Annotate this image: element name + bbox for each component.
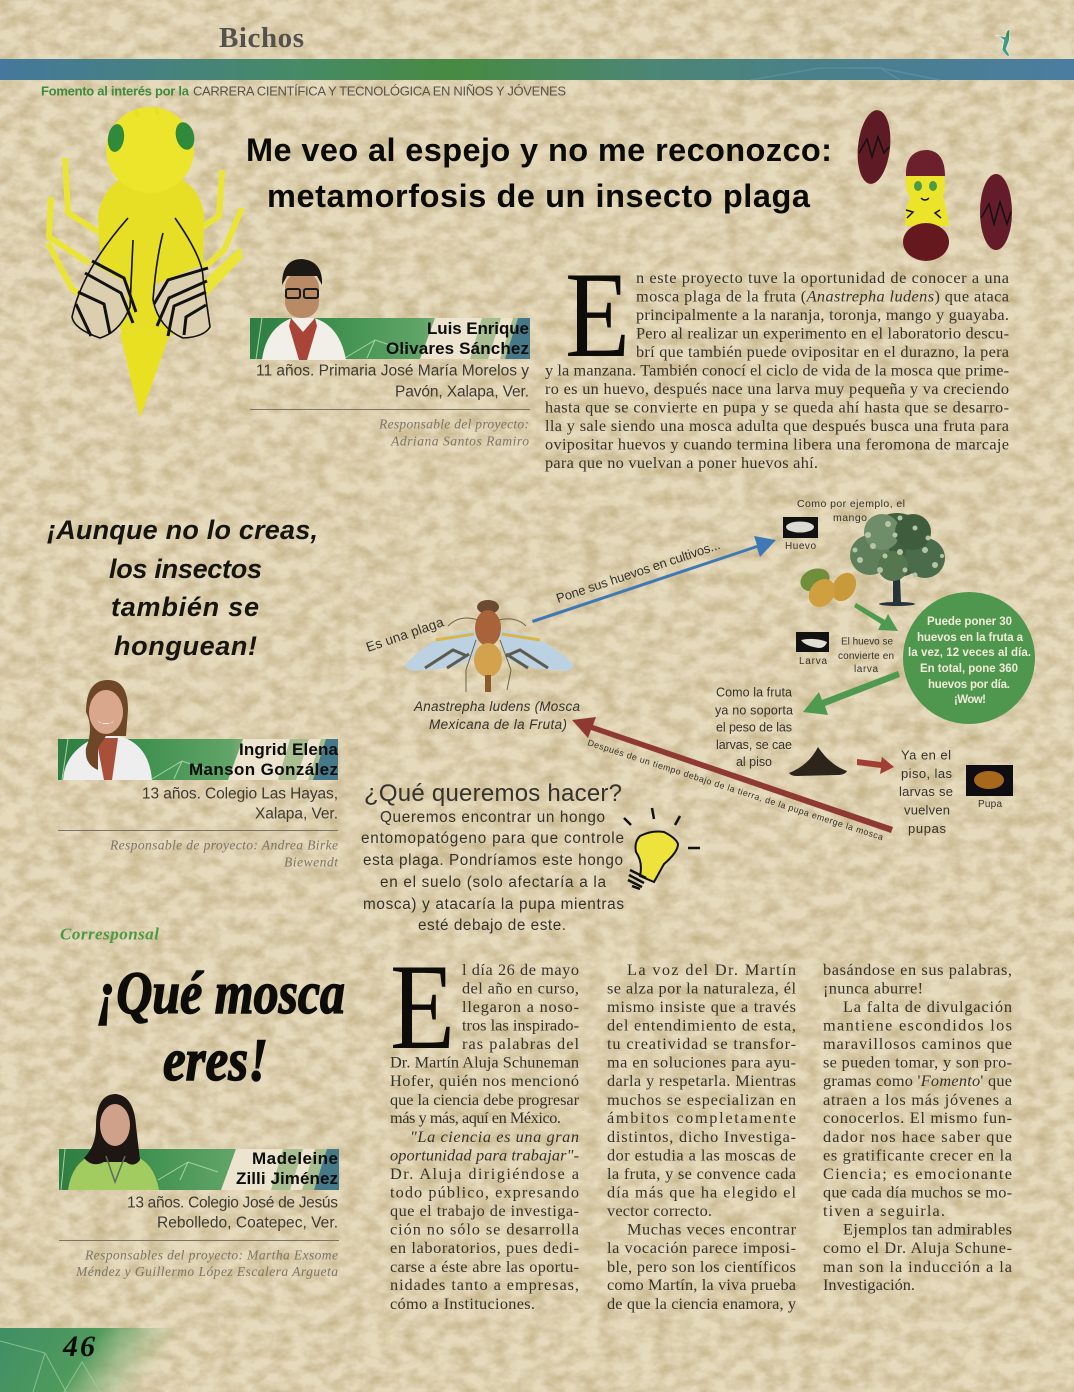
- article column 1: Dr. Martín Aluja Schuneman: [390, 1053, 579, 1072]
- school: Xalapa, Ver.: [255, 806, 338, 822]
- drop cap E: E: [390, 938, 455, 1075]
- article column 1: del año en curso,: [462, 978, 579, 998]
- article column 3: [823, 960, 1012, 1294]
- article column 3: se pueden tomar, y son pro-: [823, 1053, 1012, 1072]
- school: 13 años. Colegio José de Jesús: [127, 1194, 338, 1212]
- fly labels: Es una plaga: [364, 614, 446, 655]
- green circle callout: ¡Wow!: [954, 694, 986, 706]
- heading: Aunque no lo creas: honguean!: [114, 631, 257, 661]
- article column 1: ción no sólo se desarrolla: [390, 1220, 579, 1239]
- author card: Ingrid Elena: [58, 680, 339, 870]
- heading: Qué mosca eres: eres!: [163, 1027, 268, 1093]
- school: Rebolledo, Coatepec, Ver.: [157, 1214, 338, 1232]
- icon: light bulb: [624, 808, 700, 889]
- arrow: green to circle: [854, 603, 898, 631]
- portrait: [262, 259, 346, 360]
- article column 3: tiven a seguirla.: [823, 1201, 945, 1220]
- arrow caption: Después de un tiempo debajo de la tierra, de la pupa emerge la mosca: [586, 737, 885, 842]
- illustration: yellow fly drawing: [48, 107, 242, 418]
- article column 1: [390, 960, 580, 1313]
- portrait: [68, 1094, 159, 1190]
- name: Olivares Sánchez: [386, 339, 529, 358]
- article column 1: "La ciencia es una gran: [410, 1127, 579, 1146]
- article column 3: dador nos hace saber que: [823, 1127, 1012, 1146]
- article column 1: nidades tanto a empresas,: [390, 1275, 579, 1294]
- page number corner: [0, 1328, 175, 1392]
- article text: Luis Enrique: hasta que se convierte en pupa y se queda ahí hasta que se desarro-: [545, 398, 1009, 416]
- name: Luis Enrique: [427, 319, 529, 338]
- school: Pavón, Xalapa, Ver.: [395, 384, 529, 400]
- article column 1: llegaron a noso-: [462, 997, 579, 1016]
- running header tagline: CARRERA CIENTÍFICA Y TECNOLÓGICA EN NIÑOS Y JÓVENES: [193, 84, 566, 98]
- heading: Aunque no lo creas: [47, 515, 318, 661]
- pupa text: Ya en el: [901, 748, 951, 762]
- heading: Aunque no lo creas: los insectos: [109, 554, 262, 584]
- article column 1: carse a éste abre las oportu-: [390, 1257, 579, 1276]
- article text: Luis Enrique: para que no vuelvan a poner huevos ahí.: [545, 453, 818, 472]
- pupa text: piso, las: [901, 766, 952, 781]
- header colour bar: [0, 59, 1074, 80]
- panel: Qué queremos hacer: [361, 780, 700, 934]
- arrow: green to ground: [803, 671, 900, 715]
- article column 3: Ciencia; es emocionante: [823, 1164, 1012, 1183]
- article column 2: [607, 960, 797, 1313]
- fly labels: Pone sus huevos en cultivos...: [554, 537, 722, 606]
- text block: entomopatógeno para que controle: [361, 830, 624, 847]
- article column 3: basándose en sus palabras,: [823, 960, 1012, 979]
- name: Madeleine: [252, 1149, 338, 1168]
- pupa photo: Pupa: [978, 799, 1002, 810]
- article column 3: Investigación.: [823, 1275, 915, 1294]
- example label: Como por ejemplo, el: [797, 498, 905, 510]
- project lead: Adriana Santos Ramiro: [390, 434, 529, 448]
- name: [189, 740, 339, 779]
- tree: [850, 513, 945, 606]
- falling text: Como la fruta: [716, 686, 792, 700]
- article column 1: ras palabras del: [462, 1034, 579, 1053]
- article column 3: es gratificante crecer en la: [823, 1146, 1012, 1164]
- green circle callout: huevos en la fruta a: [917, 632, 1024, 644]
- school: 13 años. Colegio Las Hayas,: [142, 786, 338, 802]
- article text: Luis Enrique: ovipositar huevos y cuando termina libera una feromona de marcaje: [545, 434, 1009, 454]
- article text: Luis Enrique: y la manzana. También conocí el ciclo de vida de la mosca que prime-: [545, 360, 1009, 380]
- pupa text: pupas: [908, 821, 946, 836]
- falling text: al piso: [736, 755, 772, 769]
- soil pile: [789, 747, 847, 776]
- article column 3: como el Dr. Aluja Schune-: [823, 1238, 1012, 1257]
- article text: Luis Enrique: [545, 268, 1009, 472]
- article text: Luis Enrique: ro es un huevo, después nace una larva muy pequeña y va creciendo: [545, 379, 1009, 398]
- article column 2: distintos, dicho Investiga-: [607, 1127, 796, 1146]
- heading: Aunque no lo creas: ¡Aunque no lo creas,: [47, 515, 318, 545]
- article column 1: l día 26 de mayo: [462, 960, 579, 979]
- example label: mango: [833, 512, 867, 524]
- egg photo: Huevo: [785, 541, 816, 552]
- fly labels: [364, 537, 722, 732]
- article title: Me veo al espejo y no me reconozco:: [246, 132, 832, 168]
- text block: [361, 809, 624, 934]
- article text: Luis Enrique: mosca plaga de la fruta (Anastrepha ludens) que ataca: [636, 286, 1009, 306]
- name: [236, 1149, 338, 1188]
- article column 3: conocerlos. El mismo fun-: [823, 1108, 1012, 1127]
- article column 1: todo público, expresando: [390, 1183, 579, 1202]
- larva caption: El huevo se: [841, 636, 893, 648]
- article text: Luis Enrique: lla y sale siendo una mosca adulta que después busca una fruta para: [545, 416, 1009, 435]
- article title: metamorfosis de un insecto plaga: [267, 178, 811, 214]
- text block: mosca) y atacaría la pupa mientras: [363, 896, 624, 913]
- article column 2: se alza por la naturaleza, él: [607, 978, 796, 998]
- larva photo: Larva: [799, 656, 827, 667]
- name: [386, 319, 529, 358]
- name: Zilli Jiménez: [236, 1169, 338, 1188]
- article column 2: muchos se especializan en: [607, 1090, 796, 1109]
- running header tagline: Fomento al interés por la: [41, 84, 190, 98]
- text block: Queremos encontrar un hongo: [380, 809, 605, 826]
- text block: en el suelo (solo afectaría a la: [380, 874, 606, 891]
- page number corner: 46: [62, 1330, 95, 1363]
- green circle callout: huevos por día.: [928, 679, 1010, 691]
- project lead: [109, 838, 339, 870]
- article column 1: que la ciencia debe progresar: [390, 1090, 580, 1109]
- falling text: larvas, se cae: [716, 738, 792, 752]
- school: 11 años. Primaria José María Morelos y: [256, 362, 529, 380]
- project lead: [378, 416, 529, 448]
- article column 3: ¡nunca aburre!: [823, 978, 923, 998]
- name banner: [58, 739, 338, 780]
- pupa photo: [966, 765, 1013, 810]
- portrait: [63, 680, 152, 780]
- heading: Qué mosca eres: ¡Qué mosca: [97, 960, 345, 1026]
- egg photo: [783, 517, 818, 552]
- heading: Aunque no lo creas: también se: [111, 592, 259, 622]
- article column 3: La falta de divulgación: [843, 997, 1012, 1016]
- article column 3: atraen a los más jóvenes a: [823, 1090, 1012, 1109]
- project lead: Biewendt: [284, 854, 339, 870]
- article column 3: que cada día muchos se mo-: [823, 1183, 1012, 1202]
- school: [256, 362, 529, 400]
- article column 2: la fruta, y se convence cada: [607, 1164, 796, 1183]
- article column 2: día más que ha elegido el: [607, 1183, 796, 1202]
- article column 2: mismo insiste que a través: [607, 997, 796, 1016]
- article column 3: maravillosos caminos que: [823, 1034, 1012, 1053]
- diagram: life cycle of the fruit fly: [364, 498, 1035, 842]
- school: [127, 1194, 338, 1232]
- green circle callout: [903, 592, 1035, 724]
- article column 3: mantiene escondidos los: [823, 1016, 1012, 1035]
- author card: Luis Enrique: [250, 259, 530, 448]
- article column 2: la vocación parece imposi-: [607, 1238, 796, 1257]
- school: [142, 786, 338, 822]
- article text: Luis Enrique: Pero al realizar un experimento en el laboratorio descu-: [636, 324, 1009, 342]
- article column 3: Ejemplos tan admirables: [843, 1220, 1012, 1239]
- article column 2: ámbitos completamente: [607, 1108, 796, 1127]
- article column 1: tros las inspirado-: [462, 1016, 579, 1035]
- article column 1: cómo a Instituciones.: [390, 1294, 535, 1313]
- pupa text: vuelven: [904, 802, 950, 818]
- green circle callout: En total, pone 360: [920, 663, 1018, 675]
- article column 1: más y más, aquí en México.: [390, 1108, 561, 1127]
- drop cap E: E: [565, 246, 630, 383]
- article column 1: Hofer, quién nos mencionó: [390, 1071, 579, 1090]
- name banner: [59, 1149, 339, 1190]
- illustration: pupa drawings: [854, 109, 1012, 261]
- project lead: Responsable del proyecto:: [378, 416, 529, 432]
- label: Corresponsal: Corresponsal: [60, 924, 159, 944]
- project leads: [75, 1248, 338, 1279]
- mangoes: [797, 565, 861, 612]
- article column 2: como Martín, la viva prueba: [607, 1275, 796, 1294]
- fly labels: Anastrepha ludens (Mosca: [413, 699, 580, 714]
- article text: Luis Enrique: principalmente a la naranja, toronja, mango y guayaba.: [636, 305, 1009, 324]
- project leads: Méndez y Guillermo López Escalera Argueta: [75, 1264, 338, 1279]
- article column 3: man son la inducción a la: [823, 1257, 1012, 1276]
- article column 1: en laboratorios, pues dedi-: [390, 1238, 579, 1257]
- article column 3: gramas como 'Fomento' que: [823, 1071, 1012, 1090]
- name banner: [250, 318, 530, 359]
- article column 2: ma en soluciones para ayu-: [607, 1053, 796, 1072]
- text block: esta plaga. Pondríamos este hongo: [363, 852, 623, 869]
- text block: esté debajo de este.: [418, 917, 566, 934]
- article column 1: Dr. Aluja dirigiéndose a: [390, 1164, 579, 1183]
- larva caption: [838, 636, 894, 675]
- author card: Madeleine: [59, 1094, 339, 1279]
- article column 2: tu creatividad se transfor-: [607, 1034, 796, 1053]
- article column 2: La voz del Dr. Martín: [627, 960, 796, 979]
- arrow: small red: [857, 757, 894, 774]
- article column 1: que el trabajo de investiga-: [390, 1201, 579, 1220]
- icon: hummingbird: [995, 29, 1010, 56]
- name: Manson González: [189, 760, 338, 779]
- project leads: Responsables del proyecto: Martha Exsome: [84, 1248, 338, 1262]
- article column 2: darla y respetarla. Mientras: [607, 1071, 796, 1090]
- article text: Luis Enrique: n este proyecto tuve la oportunidad de conocer a una: [636, 268, 1009, 287]
- heading: Qué mosca eres: [97, 960, 345, 1093]
- falling text: el peso de las: [716, 720, 792, 734]
- article column 2: de que la ciencia enamora, y: [607, 1294, 797, 1313]
- larva photo: [796, 632, 829, 667]
- green circle callout: Puede poner 30: [927, 616, 1012, 628]
- example label: [797, 498, 905, 524]
- article column 2: dor estudia a las moscas de: [607, 1146, 796, 1164]
- falling text: [715, 686, 793, 769]
- arrow: blue: [532, 536, 776, 623]
- falling text: ya no soporta: [715, 704, 793, 718]
- fly illustration: [405, 600, 574, 692]
- larva caption: convierte en: [838, 651, 894, 662]
- article text: Luis Enrique: brí que también puede ovipositar en el durazno, la pera: [636, 342, 1009, 361]
- name: Ingrid Elena: [239, 740, 339, 759]
- pupa text: larvas se: [899, 784, 953, 799]
- green circle callout: la vez, 12 veces al día.: [908, 647, 1031, 659]
- article column 2: del entendimiento de esta,: [607, 1016, 796, 1035]
- heading: ¿Qué queremos hacer?: [364, 780, 622, 807]
- article title: [246, 132, 832, 214]
- article column 2: vector correcto.: [607, 1201, 712, 1220]
- article column 1: oportunidad para trabajar"-: [390, 1146, 579, 1164]
- pupa text: [899, 748, 953, 836]
- arrow: long red: [572, 717, 893, 833]
- larva caption: larva: [854, 664, 878, 675]
- article column 2: Muchas veces encontrar: [627, 1220, 797, 1239]
- section heading: Bichos: Bichos: [219, 22, 304, 54]
- project lead: Responsable de proyecto: Andrea Birke: [109, 838, 338, 852]
- article column 2: ble, pero son los científicos: [607, 1257, 796, 1276]
- fly labels: Mexicana de la Fruta): [429, 717, 567, 732]
